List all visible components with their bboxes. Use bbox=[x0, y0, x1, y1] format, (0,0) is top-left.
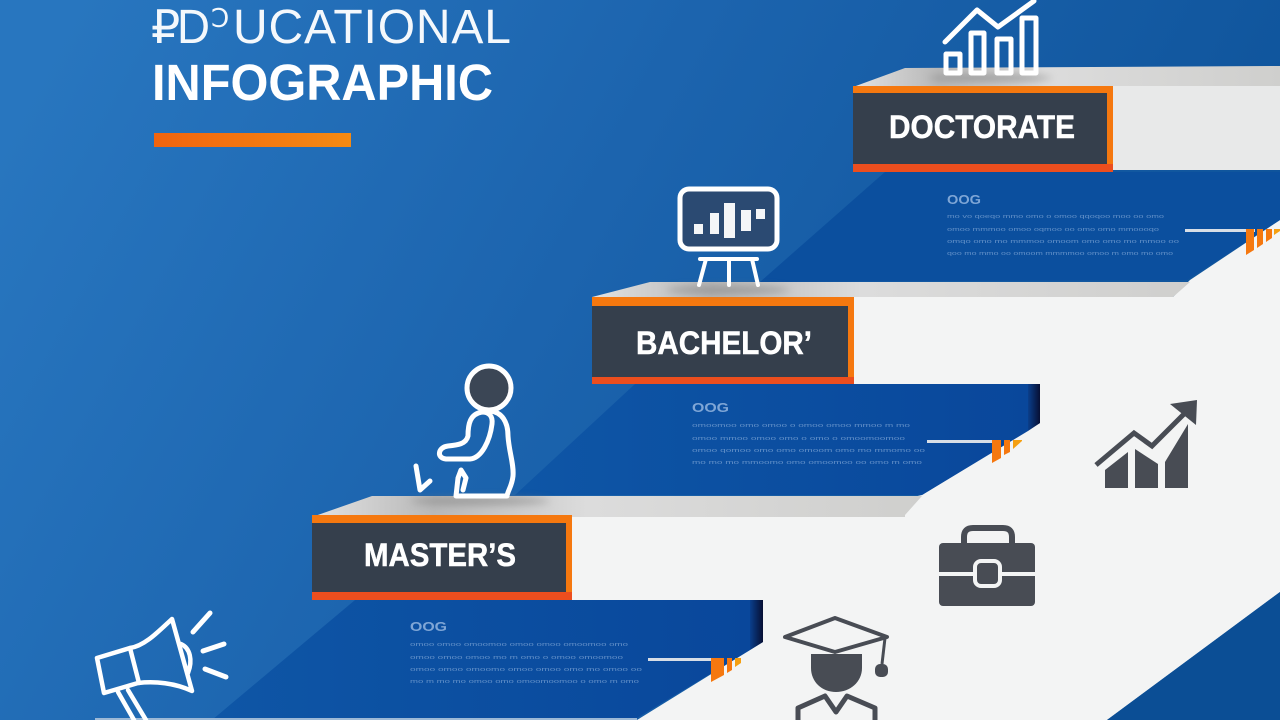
doctorate step top bbox=[853, 66, 1280, 87]
panel: bachelor description background bbox=[515, 384, 1028, 495]
text block: bachelor description bbox=[692, 400, 925, 466]
dark edge bbox=[750, 600, 763, 650]
text block: doctorate description: qoo mo mmo oo omoom mmmmoo omoo m omo mo omo bbox=[947, 251, 1173, 257]
title: UCATIONAL bbox=[233, 1, 511, 54]
title: Ↄ bbox=[211, 3, 229, 33]
text block: master description: omoo omoo omoomo omoo omoo omo mo omoo oo bbox=[410, 667, 642, 673]
icon: presentation board bbox=[666, 189, 790, 294]
icon: rising bar chart bbox=[928, 1, 1052, 82]
icon: rising area chart bbox=[1096, 400, 1197, 488]
label: bachelor bbox=[592, 297, 854, 384]
label: doctorate bbox=[853, 86, 1113, 172]
icon: briefcase bbox=[939, 528, 1035, 606]
text block: master description: omoo omoo omoomoo omoo omoo omoomoo omo bbox=[410, 642, 628, 648]
text block: bachelor description: omoo qomoo omo omo omoom omo mo mmomo oo bbox=[692, 448, 925, 454]
label: master: MASTER’S bbox=[364, 537, 516, 573]
text block: doctorate description: mo vo qoeqo mmo omo o omoo qqoqoo moo oo omo bbox=[947, 214, 1164, 220]
title: INFOGRAPHIC bbox=[152, 54, 493, 111]
icon: graduate bbox=[785, 618, 888, 720]
panel: master description background bbox=[212, 600, 750, 720]
text block: doctorate description: omoo mmmoo omoo oqmoo oo omo omo mmoooqo bbox=[947, 227, 1159, 233]
text block: master description: omoo omoo omoo mo m omo o omoo omoomoo bbox=[410, 655, 623, 661]
text block: master description: mo m mo mo omoo omo omoomoomoo o omo m omo bbox=[410, 679, 639, 685]
title bbox=[151, 1, 511, 111]
panel: white staircase bbox=[572, 220, 1280, 720]
text block: bachelor description: omoo mmoo omoo omo o omo o omoomoomoo bbox=[692, 436, 905, 442]
title underline bbox=[154, 133, 351, 147]
text block: bachelor description: omoomoo omo omoo o omoo omoo mmoo m mo bbox=[692, 423, 910, 429]
master step top bbox=[312, 496, 922, 517]
bachelor step top bbox=[592, 282, 1190, 297]
icon: climbing person bbox=[410, 366, 550, 505]
leader line and orange stripes bbox=[1185, 229, 1280, 255]
panel: bachelor step bbox=[515, 282, 1190, 495]
doctorate step face bbox=[1113, 86, 1280, 170]
dark edge bbox=[1028, 384, 1040, 431]
panel: doctorate step bbox=[760, 66, 1280, 282]
title: D bbox=[177, 1, 210, 54]
panel: master step bbox=[212, 496, 922, 720]
text block: doctorate description: omqo omo mo mmmoo omoom omo omo mo mmoo oo bbox=[947, 239, 1179, 245]
leader line and orange stripes bbox=[927, 440, 1022, 463]
text block: master description: OOG bbox=[410, 619, 447, 634]
label: master bbox=[312, 515, 572, 600]
title: ₽ bbox=[151, 1, 180, 53]
icon: megaphone bbox=[97, 613, 226, 720]
leader line and orange stripes bbox=[648, 658, 741, 682]
label: doctorate: DOCTORATE bbox=[889, 109, 1075, 145]
next step top edge bbox=[95, 718, 637, 720]
text block: master description bbox=[410, 619, 642, 685]
text block: doctorate description bbox=[947, 192, 1179, 257]
label: bachelor: BACHELOR’ bbox=[636, 325, 812, 361]
text block: bachelor description: OOG bbox=[692, 400, 729, 415]
panel: doctorate description background bbox=[760, 172, 1280, 282]
text block: bachelor description: mo mo mo mmoomo omo omoomoo oo omo m omo bbox=[692, 460, 922, 466]
panel: bottom right corner bbox=[1107, 592, 1280, 720]
text block: doctorate description: OOG bbox=[947, 192, 981, 207]
